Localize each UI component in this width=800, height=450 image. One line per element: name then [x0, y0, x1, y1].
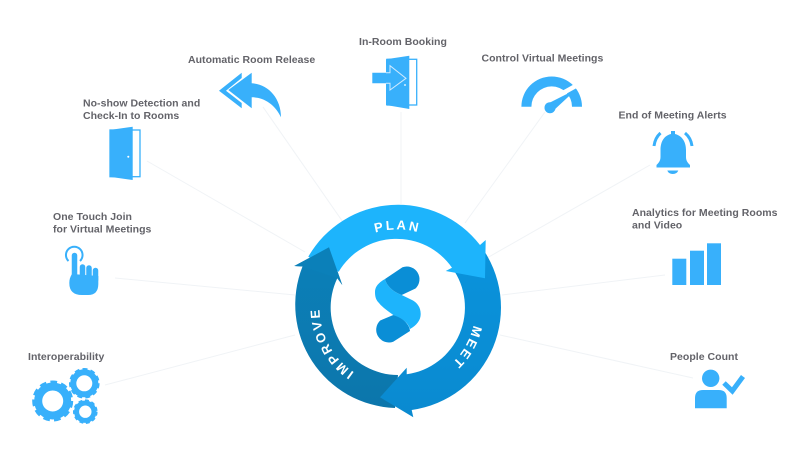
cycle diagram	[294, 204, 501, 418]
center S logo	[375, 267, 421, 342]
label: No-show Detection and Check-In to Rooms: Check-In to Rooms	[83, 110, 179, 122]
arrowhead: improve	[294, 247, 342, 285]
icon: touch hand	[66, 247, 98, 295]
label: PLAN: PLAN	[374, 220, 418, 232]
label: People Count: People Count	[670, 351, 738, 363]
label: One Touch Join for Virtual Meetings: One Touch Join	[53, 211, 132, 223]
label: Analytics for Meeting Rooms and Video: and Video	[632, 220, 682, 232]
label: MEET: MEET	[454, 326, 482, 368]
label: One Touch Join for Virtual Meetings: for Virtual Meetings	[53, 224, 152, 236]
icon: return arrow	[219, 73, 281, 117]
label: End of Meeting Alerts: End of Meeting Alerts	[618, 110, 727, 122]
icon: person with check	[695, 370, 743, 408]
icon: gauge	[521, 76, 582, 113]
label: In-Room Booking: In-Room Booking	[359, 36, 447, 48]
label: IMPROVE: IMPROVE	[310, 310, 354, 380]
icon: bar chart	[672, 243, 721, 285]
icon: door with arrow	[372, 56, 417, 109]
arrow segment: plan	[308, 205, 486, 278]
label: Control Virtual Meetings: Control Virtual Meetings	[482, 52, 604, 64]
icon: bell	[654, 131, 692, 174]
label: Analytics for Meeting Rooms and Video: Analytics for Meeting Rooms	[632, 207, 778, 219]
arrow segment: improve	[294, 247, 398, 408]
icon: gears	[34, 370, 98, 423]
icon: open door	[110, 127, 140, 180]
label: Interoperability: Interoperability	[28, 351, 104, 363]
arrow segment: meet	[380, 245, 501, 417]
label: No-show Detection and Check-In to Rooms: No-show Detection and	[83, 98, 200, 110]
label: Automatic Room Release: Automatic Room Release	[188, 54, 315, 66]
